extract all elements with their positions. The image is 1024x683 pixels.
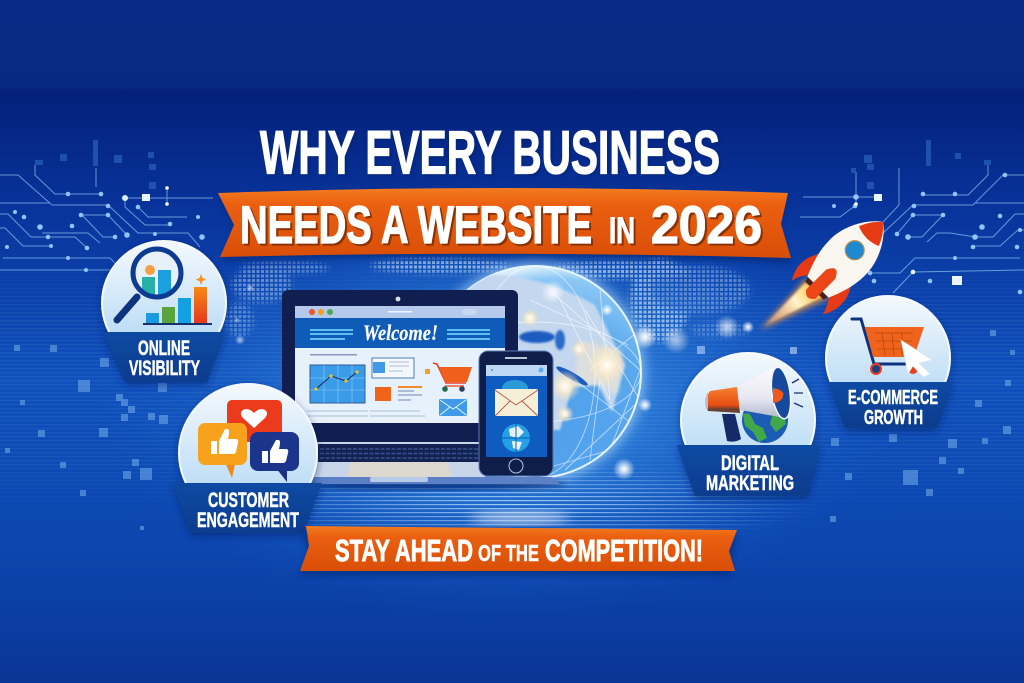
laptop [282, 290, 566, 490]
circuit lines left [0, 165, 213, 270]
banner text: IN [611, 212, 637, 253]
title [260, 118, 722, 188]
world map dot grid [225, 256, 753, 345]
icon: megaphone and globe [705, 366, 803, 443]
line chart [310, 365, 365, 403]
banner text: 2026 [651, 196, 762, 255]
banner text: STAY AHEAD [335, 533, 473, 568]
phone globe icon [502, 424, 530, 452]
phone home button [509, 459, 523, 473]
icon: social bubbles [198, 400, 299, 482]
badge: e-commerce growth [826, 296, 953, 429]
title: WHY EVERY BUSINESS [262, 120, 722, 188]
rocket flame [760, 278, 830, 330]
circuit nodes right [832, 140, 1022, 294]
banner: stay ahead of the competition [300, 526, 737, 576]
label: GROWTH [864, 407, 923, 429]
phone [479, 351, 553, 476]
banner text: 2026 [653, 198, 764, 257]
label: ENGAGEMENT [197, 509, 299, 532]
badge: customer engagement [173, 384, 322, 533]
rocket [760, 202, 903, 330]
banner text: OF THE [478, 540, 539, 566]
laptop base and keyboard [295, 442, 560, 484]
glowing sparkles [234, 284, 754, 354]
banner text: COMPETITION! [545, 533, 703, 568]
banner text: IN [609, 210, 635, 251]
label [706, 452, 794, 495]
label [129, 337, 200, 380]
laptop lid [282, 290, 518, 446]
floating data squares [5, 330, 1015, 530]
welcome heading: Welcome! [363, 320, 438, 345]
ribbon [677, 445, 821, 496]
circuit nodes left [5, 140, 205, 272]
icon: bar chart and magnifier [117, 249, 212, 324]
label: CUSTOMER [208, 489, 289, 512]
label [197, 489, 299, 532]
ribbon [173, 483, 322, 533]
title: WHY EVERY BUSINESS [260, 118, 720, 186]
label: DIGITAL [721, 452, 779, 475]
badge: digital marketing [677, 353, 821, 496]
globe [425, 262, 657, 482]
cart icon on screen [425, 363, 472, 392]
label [848, 387, 938, 429]
circuit lines right [800, 165, 1024, 293]
banner text: NEEDS A WEBSITE [242, 198, 594, 257]
label: E-COMMERCE [848, 387, 938, 409]
banner text [335, 533, 703, 568]
phone envelope icon [495, 380, 538, 416]
laptop camera [396, 297, 400, 301]
banner: needs a website in 2026 [218, 188, 791, 263]
label: MARKETING [706, 472, 794, 495]
ribbon [829, 382, 953, 428]
continents [468, 274, 626, 432]
ribbon [103, 332, 225, 382]
laptop screen [295, 306, 505, 423]
label: VISIBILITY [129, 357, 200, 380]
rocket window [841, 237, 868, 264]
label: ONLINE [138, 337, 190, 360]
badge: online visibility [102, 241, 226, 382]
mail icon on screen [439, 399, 467, 416]
banner text: NEEDS A WEBSITE [240, 196, 592, 255]
icon: shopping cart with cursor [852, 319, 932, 377]
